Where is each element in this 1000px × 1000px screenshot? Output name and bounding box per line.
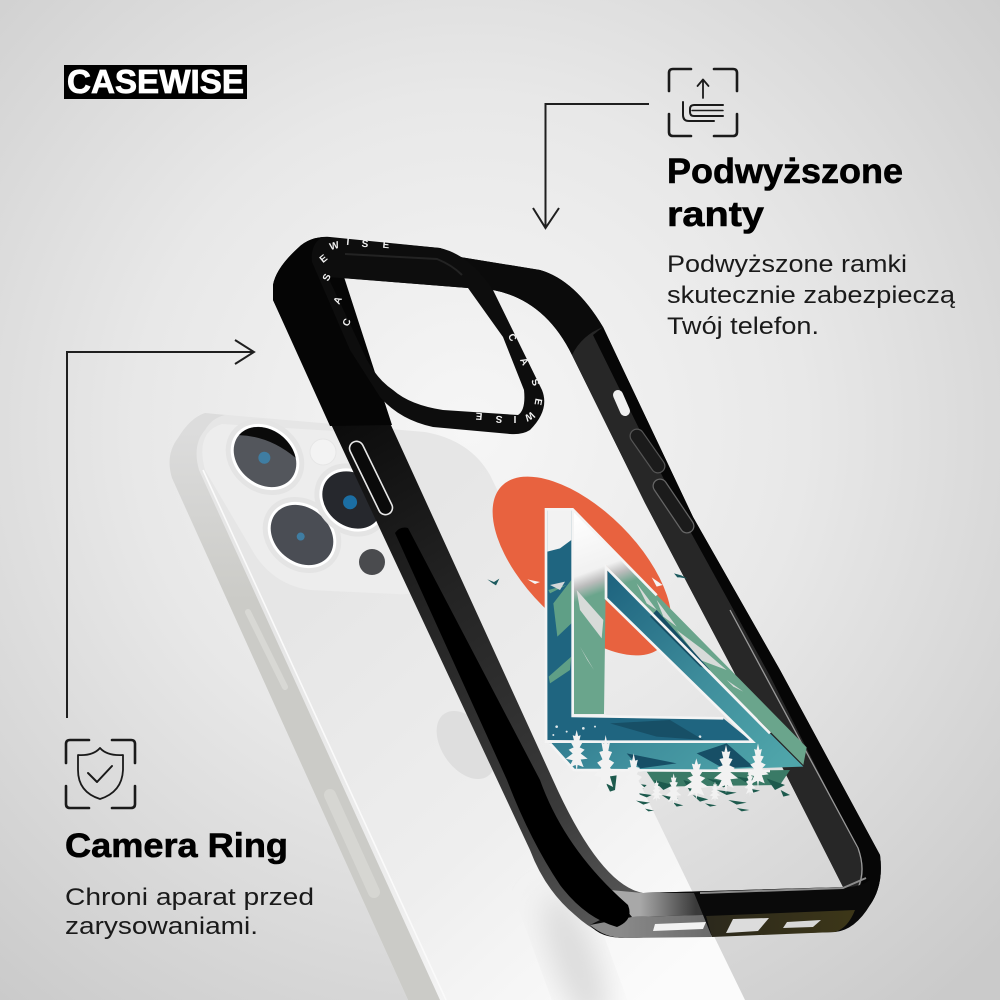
port left [653, 922, 706, 931]
ridge streaks on bands [550, 582, 743, 692]
case artwork [462, 446, 807, 811]
ring bevel [345, 254, 462, 275]
port middle [726, 918, 769, 933]
sensor [359, 549, 385, 575]
lens bottom [247, 481, 357, 589]
dark streaks in teal [610, 610, 753, 768]
volume up button [637, 436, 658, 466]
volume down inner [660, 486, 687, 526]
ring text right and bottom: S [528, 377, 541, 388]
ring text right and bottom: W [522, 409, 536, 423]
speaker hole [618, 395, 625, 411]
bottom bar specks [552, 723, 701, 738]
white trees [566, 730, 769, 805]
case left slot [395, 528, 630, 927]
logo text: CASEWISE [67, 63, 244, 100]
description: camera ring: zarysowaniami. [65, 913, 258, 940]
phone side highlight [203, 470, 446, 1000]
green strip under bottom band [647, 770, 790, 787]
description: raised edges: Twój telefon. [667, 313, 819, 340]
phone body [170, 413, 745, 1000]
bottom port face [706, 910, 855, 937]
dark tree flecks [606, 772, 790, 811]
logo plate [64, 65, 247, 99]
ring text right and bottom: S [495, 413, 503, 424]
port right [783, 920, 821, 928]
phone side band [170, 413, 440, 1000]
ring text right and bottom: A [517, 356, 530, 367]
case frame [273, 237, 881, 938]
lens top [210, 403, 320, 511]
description: camera ring [65, 884, 314, 940]
case bottom bar [590, 880, 870, 938]
power button [330, 795, 374, 892]
description: raised edges [667, 251, 956, 340]
camera ring [312, 237, 544, 434]
ring text left and top: A [332, 295, 345, 306]
sun birds [527, 577, 663, 587]
ring text left and top: E [382, 240, 390, 251]
brand logo [64, 63, 247, 100]
ring text right and bottom: C [505, 332, 518, 343]
ring text left and top: S [361, 239, 369, 250]
ring text left and top: W [328, 240, 341, 253]
ring text right and bottom: E [475, 410, 483, 421]
ring text left and top: I [346, 237, 350, 248]
description: camera ring: Chroni aparat przed [65, 884, 314, 911]
case right outer edge [593, 327, 881, 905]
volume up inner [637, 436, 658, 466]
heading: raised edges: Podwyższone [667, 152, 903, 191]
lens right [300, 448, 404, 552]
bird right [674, 573, 687, 579]
arrow to raised edges [533, 104, 649, 228]
left blue bar [547, 509, 752, 742]
flash [310, 439, 336, 465]
camera plateau [202, 424, 422, 594]
ring text right and bottom: I [513, 413, 516, 424]
volume button [248, 612, 285, 687]
description: raised edges: skutecznie zabezpieczą [667, 282, 956, 309]
case bottom translucent lower [590, 915, 712, 938]
triangle outlines [546, 509, 770, 771]
apple logo mark [425, 700, 507, 790]
black upper left section [273, 237, 392, 426]
ring text right and bottom: E [531, 397, 544, 406]
diagonal green band [574, 511, 807, 765]
side button pill [347, 439, 395, 517]
ring text left and top: S [321, 272, 334, 283]
bird left [487, 579, 499, 585]
left bar green streaks [548, 580, 571, 683]
case bottom translucent upper [610, 890, 703, 917]
volume down button [660, 486, 687, 526]
ring text right and bottom [475, 332, 544, 424]
arrow to camera ring [67, 340, 254, 718]
case top frame [400, 248, 603, 355]
description: raised edges: Podwyższone ramki [667, 251, 907, 278]
white phone [170, 403, 745, 1000]
clear case [273, 237, 881, 938]
diagonal teal band [549, 570, 803, 772]
ring text left and top [318, 237, 390, 328]
case right glint [730, 610, 862, 888]
heading: camera ring: Camera Ring [65, 827, 288, 865]
heading second line: ranty [667, 195, 765, 234]
bottom highlight [700, 878, 866, 893]
left bar snow [547, 510, 571, 552]
icon: shield [66, 740, 135, 808]
case right band [572, 327, 881, 905]
icon: raised edges [669, 69, 737, 136]
ring text left and top: C [341, 317, 354, 328]
sun [462, 446, 702, 686]
phone back soft shade [530, 887, 620, 1000]
ring text left and top: E [318, 253, 330, 266]
